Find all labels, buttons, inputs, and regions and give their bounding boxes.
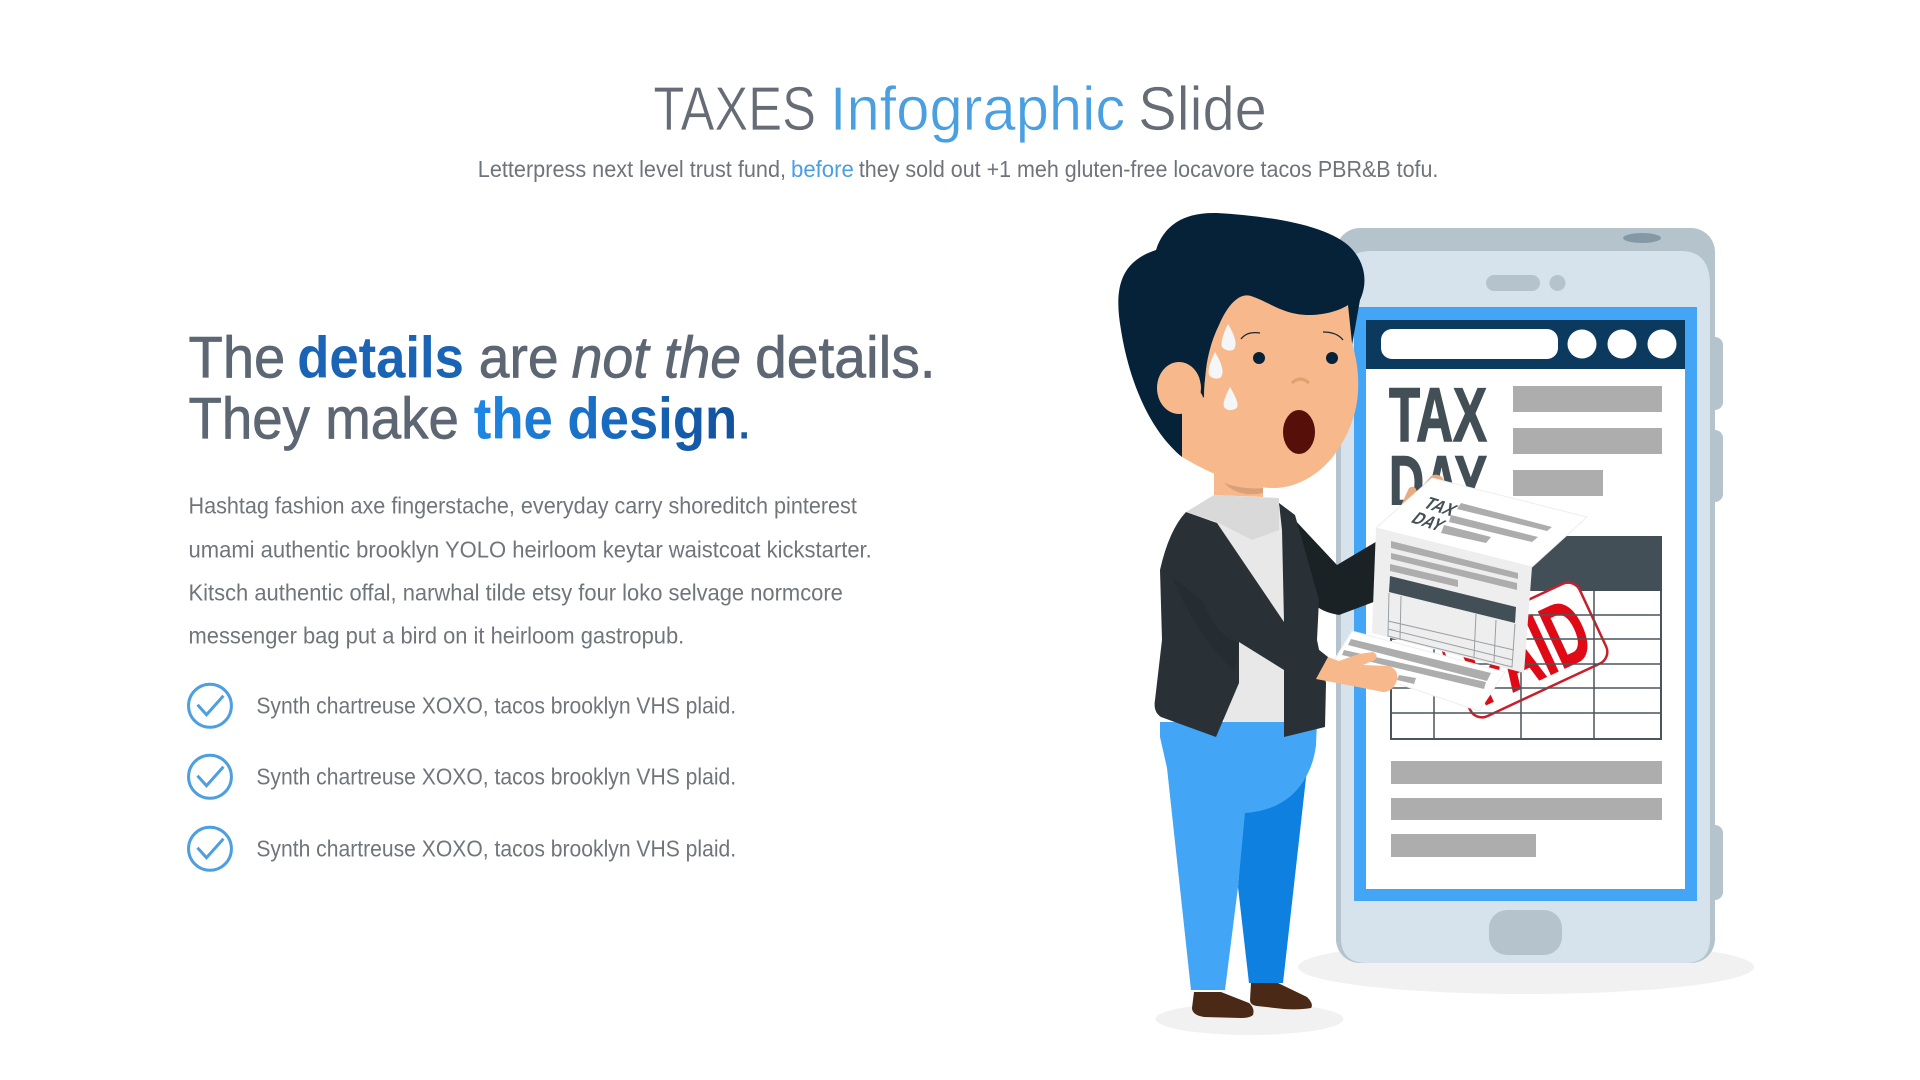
sweat drops: [1209, 324, 1238, 410]
front trouser leg: [1160, 722, 1317, 990]
front paper dark band: [1389, 576, 1516, 623]
hair sliver: [1195, 350, 1208, 398]
paid stamp: PAID: [1449, 580, 1605, 724]
back trouser leg: [1238, 760, 1308, 983]
lower text bars: [1391, 761, 1662, 857]
face: [1182, 295, 1358, 488]
top paper bars: [1441, 503, 1552, 543]
ear: [1157, 362, 1201, 414]
screen frame: [1354, 307, 1697, 901]
jacket left panel: [1155, 512, 1328, 737]
top paper face: [1376, 478, 1587, 567]
item 1: [189, 684, 736, 727]
top paper label: DAY: [1407, 508, 1450, 535]
tax day text: [1389, 388, 1488, 505]
fingers behind paper: [1399, 475, 1444, 520]
eyes and brows: [1241, 332, 1343, 364]
heading: details: [297, 326, 464, 391]
front paper face: [1372, 528, 1532, 673]
sensor: [1623, 233, 1661, 243]
lower paper: [1333, 631, 1505, 711]
subtitle: Letterpress next level trust fund,: [478, 156, 786, 182]
body text: umami authentic brooklyn YOLO heirloom keytar waistcoat kickstarter.: [189, 537, 872, 563]
heading: .: [736, 387, 752, 452]
paid stamp: [1437, 576, 1615, 730]
front paper bars: [1390, 541, 1518, 590]
jacket right panel: [1279, 503, 1326, 737]
item 3: [189, 827, 736, 870]
browser bar: [1366, 320, 1685, 369]
heading: details.: [755, 326, 936, 391]
phone body: [1336, 228, 1715, 963]
speaker: [1486, 275, 1540, 291]
person illustration: [1118, 213, 1587, 1018]
body text: [189, 493, 872, 649]
heading: are: [479, 326, 559, 391]
nose: [1292, 379, 1309, 383]
collar: [1186, 495, 1279, 540]
tax day text: DAY: [1389, 441, 1487, 526]
item 2: [189, 755, 736, 798]
body text: Hashtag fashion axe fingerstache, everyday carry shoreditch pinterest: [189, 493, 857, 519]
heading: the design: [474, 387, 737, 452]
mouth: [1283, 410, 1315, 454]
hair: [1118, 213, 1364, 457]
heading: not the: [572, 326, 741, 391]
screen: [1366, 320, 1685, 889]
body text: Kitsch authentic offal, narwhal tilde etsy four loko selvage normcore: [189, 580, 843, 606]
far arm: [1279, 503, 1379, 615]
shirt: [1215, 510, 1284, 722]
heading: They make: [189, 387, 459, 452]
tax day text: TAX: [1389, 373, 1487, 458]
document stack: [1333, 478, 1587, 711]
phone illustration: [1336, 228, 1723, 963]
lower paper bars: [1342, 639, 1491, 689]
title: Slide: [1138, 75, 1267, 144]
side buttons: [1702, 337, 1723, 900]
shoes: [1192, 983, 1312, 1018]
subtitle: before: [791, 156, 854, 182]
heading: The: [189, 326, 285, 391]
title: Infographic: [830, 75, 1125, 144]
subtitle: [478, 156, 1438, 182]
top paper label: TAX: [1419, 493, 1462, 520]
item 1: Synth chartreuse XOXO, tacos brooklyn VHS plaid.: [256, 693, 736, 719]
home button: [1489, 910, 1562, 955]
checklist: [189, 684, 736, 870]
person shadow: [1156, 1003, 1344, 1035]
phone shadow: [1298, 940, 1754, 994]
table header: [1390, 536, 1662, 591]
top paper label: [1407, 493, 1462, 535]
heading: [189, 326, 936, 452]
upper text bars: [1513, 386, 1662, 496]
title: [653, 75, 1267, 144]
neck shadow: [1224, 483, 1263, 494]
hand: [1316, 652, 1397, 692]
neck: [1214, 465, 1263, 497]
body text: messenger bag put a bird on it heirloom gastropub.: [189, 623, 684, 649]
jacket fold: [1172, 577, 1239, 672]
item 3: Synth chartreuse XOXO, tacos brooklyn VHS plaid.: [256, 836, 736, 862]
phone face: [1341, 251, 1710, 963]
subtitle: they sold out +1 meh gluten-free locavore tacos PBR&B tofu.: [859, 156, 1438, 182]
item 2: Synth chartreuse XOXO, tacos brooklyn VHS plaid.: [256, 764, 736, 790]
front paper table lines: [1388, 593, 1515, 667]
table grid: [1390, 591, 1661, 739]
title: TAXES: [653, 75, 816, 144]
